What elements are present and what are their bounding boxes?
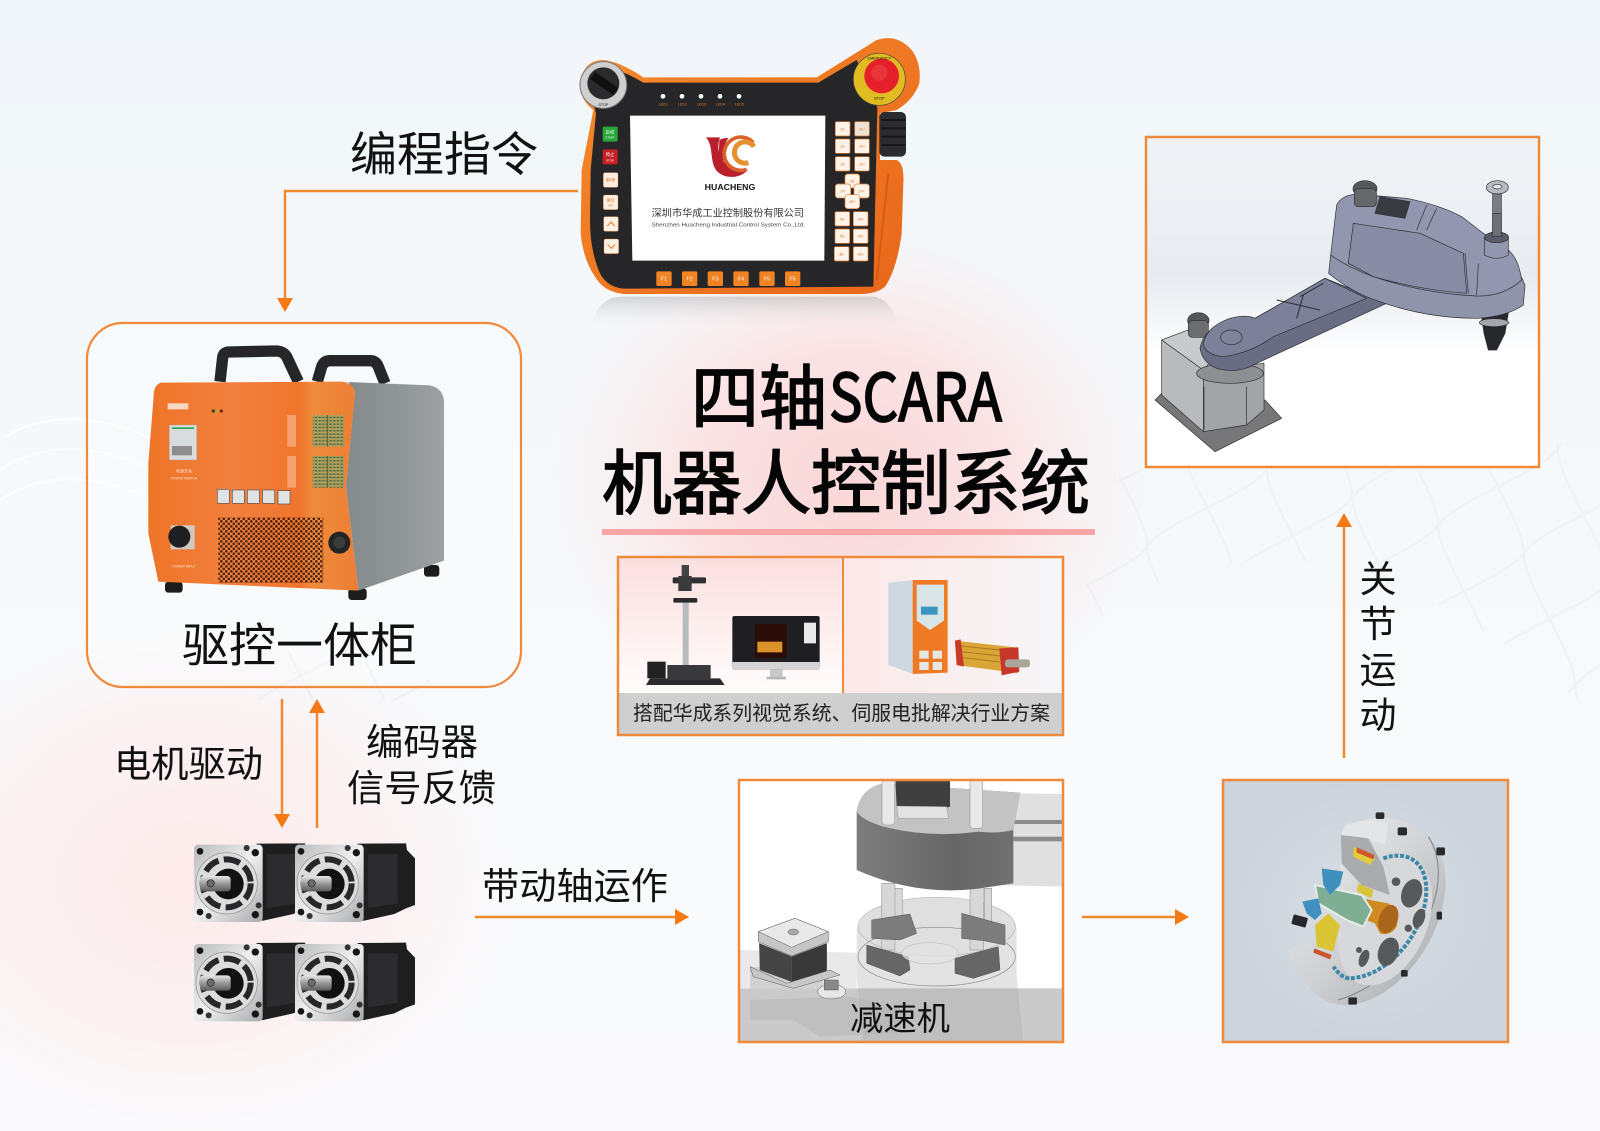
arrow: reducer to robot (1336, 513, 1352, 758)
cabinet illustration: POWER INPUT (172, 564, 196, 568)
motor bottom left (194, 943, 314, 1021)
servo motors (194, 843, 415, 1021)
label: programming instruction: 编程指令 (350, 128, 538, 181)
reducer label: 减速机 (850, 1000, 950, 1037)
arrow: gearbox to reducer (1082, 909, 1189, 925)
label: motor drive: 电机驱动 (114, 744, 263, 785)
right jog keys: J6+ (857, 251, 865, 256)
label: joint motion: 动 (1360, 695, 1396, 736)
panel: SCARA robot (1146, 137, 1539, 467)
vent (218, 517, 323, 583)
left keys: VIP (608, 204, 613, 208)
cabinet illustration: 电源开关 (176, 468, 192, 474)
panel: vision and servo solutions (618, 557, 1063, 735)
right jog keys: J2+ (859, 144, 866, 149)
Z-axis rod (1493, 193, 1501, 244)
robot illustration (1155, 181, 1525, 452)
pendant orange shell (580, 38, 920, 294)
left keys: 启动 (606, 128, 615, 135)
left keys (603, 127, 619, 254)
upper motor cap (1353, 181, 1377, 197)
right jog keys: J3+ (859, 161, 866, 166)
upper arm housing (1331, 194, 1522, 296)
side panel (346, 382, 444, 591)
label: joint motion: 运 (1360, 650, 1396, 691)
left keys: START (605, 136, 615, 140)
inner flange (1320, 841, 1450, 999)
function keys: F2 (687, 277, 693, 283)
right jog keys: J4- (840, 216, 846, 221)
front panel (148, 382, 358, 591)
motor top left (194, 843, 314, 922)
grip groove (877, 173, 888, 280)
motor top right (295, 843, 415, 922)
left keys: 单/步 (606, 177, 616, 184)
right jog keys (834, 122, 869, 261)
assembly illustration (739, 780, 1063, 1043)
right jog keys: J4+ (857, 216, 865, 221)
translucent lower details (750, 997, 862, 1036)
upper dark housing (857, 783, 1020, 890)
right jog keys: J7+ (858, 188, 866, 193)
title (602, 343, 1090, 529)
left keys: STOP (606, 158, 614, 162)
company logo: HUACHENG (705, 183, 755, 192)
label: drives axis motion: 带动轴运作 (482, 866, 668, 907)
pulley (818, 980, 846, 999)
function keys: F5 (764, 277, 770, 283)
bolts (1348, 812, 1445, 1005)
mode key switch: STOP (598, 103, 609, 107)
panel: reducer assembly (739, 780, 1063, 1043)
upper rods and stepper (895, 780, 950, 808)
status LEDs: LED5 (735, 102, 744, 106)
connectors (171, 525, 195, 549)
lower arm (1200, 278, 1387, 370)
base box (1162, 340, 1203, 432)
lower rods (882, 883, 992, 950)
emergency stop button: STOP (874, 95, 885, 100)
status LEDs: LED4 (716, 102, 725, 106)
blue gears (1322, 868, 1343, 895)
pendant screen (630, 116, 825, 261)
pendant black face (588, 60, 877, 289)
black roller (1291, 914, 1308, 928)
side wheel (879, 112, 906, 157)
left keys: 复位 (607, 197, 615, 203)
arrow: motors to gearbox (475, 909, 689, 925)
pendant reflection (592, 297, 897, 327)
label: encoder signal feedback: 编码器 (366, 722, 478, 763)
label: encoder signal feedback (347, 722, 496, 809)
servo driver illustration (888, 580, 1030, 675)
translucent lower housing (857, 897, 1023, 1042)
company name: Shenzhen Huacheng Industrial Control System Co.,Ltd. (652, 223, 805, 229)
title: 四轴 (691, 343, 827, 444)
LEDs (212, 409, 215, 413)
title: SCARA (829, 345, 1002, 441)
function keys: F6 (790, 277, 796, 283)
right jog keys: J6- (839, 251, 845, 256)
yellow blocks (1315, 913, 1340, 952)
solutions caption: 搭配华成系列视觉系统、伺服电批解决行业方案 (633, 702, 1050, 725)
arrow: encoder feedback up (309, 699, 325, 828)
right jog keys: J1+ (859, 126, 866, 131)
flange cut block (1341, 835, 1390, 895)
harmonic reducer illustration (1287, 812, 1450, 1005)
arrow: motor drive down (274, 699, 290, 828)
right jog keys: J1- (840, 126, 846, 131)
base motor cap (1188, 313, 1209, 329)
cabinet illustration: POWER SWITCH (171, 476, 198, 480)
emergency stop button (853, 53, 905, 105)
right jog keys: J5+ (857, 234, 865, 239)
label: encoder signal feedback: 信号反馈 (347, 768, 496, 809)
breaker (169, 425, 197, 460)
function keys: F1 (661, 277, 667, 283)
status LEDs (659, 94, 744, 106)
right jog keys: J8+ (849, 199, 856, 204)
network ports (217, 489, 290, 504)
terminals (313, 415, 344, 447)
upper arm band (1329, 255, 1525, 318)
holes (1356, 876, 1428, 969)
status LEDs: LED2 (678, 102, 687, 106)
function keys: F4 (738, 277, 744, 283)
status LEDs: LED3 (697, 102, 706, 106)
left keys: 停止 (606, 151, 615, 158)
arrow: pendant to cabinet (277, 191, 578, 312)
label: joint motion (1360, 559, 1396, 736)
base plate (1155, 393, 1282, 452)
status LEDs: LED1 (659, 102, 668, 106)
outer housing (1287, 818, 1446, 1005)
end effector (1479, 307, 1509, 350)
green gears (1315, 885, 1372, 927)
stepper motor (750, 918, 840, 988)
right jog keys: J7- (840, 188, 846, 193)
company name (652, 207, 805, 229)
title: 机器人控制系统 (602, 428, 1090, 529)
feet (165, 565, 439, 600)
handles (220, 351, 385, 383)
right jog keys: J5- (840, 234, 846, 239)
right jog keys: J2- (840, 144, 846, 149)
right jog keys: J8- (850, 178, 856, 183)
cabinet label: 驱控一体柜 (182, 619, 417, 672)
bearing balls (1333, 856, 1426, 978)
panel: harmonic reducer (1223, 780, 1508, 1042)
motor bottom right (295, 943, 415, 1021)
cabinet illustration (148, 351, 444, 600)
mode key switch (580, 62, 627, 108)
teach pendant (580, 38, 920, 327)
clamp blocks (867, 913, 1005, 978)
panel: drive-control cabinet (87, 323, 521, 687)
company name: 深圳市华成工业控制股份有限公司 (652, 207, 804, 220)
company logo (705, 137, 755, 192)
emergency stop button: EMERGENCY (868, 56, 892, 60)
label: joint motion: 节 (1360, 604, 1396, 645)
title underline (602, 529, 1095, 535)
vision system illustration (646, 565, 820, 685)
label: joint motion: 关 (1360, 559, 1396, 600)
function keys (656, 271, 800, 286)
right jog keys: J3- (840, 161, 846, 166)
orange input shaft (1357, 898, 1397, 934)
function keys: F3 (712, 277, 718, 283)
